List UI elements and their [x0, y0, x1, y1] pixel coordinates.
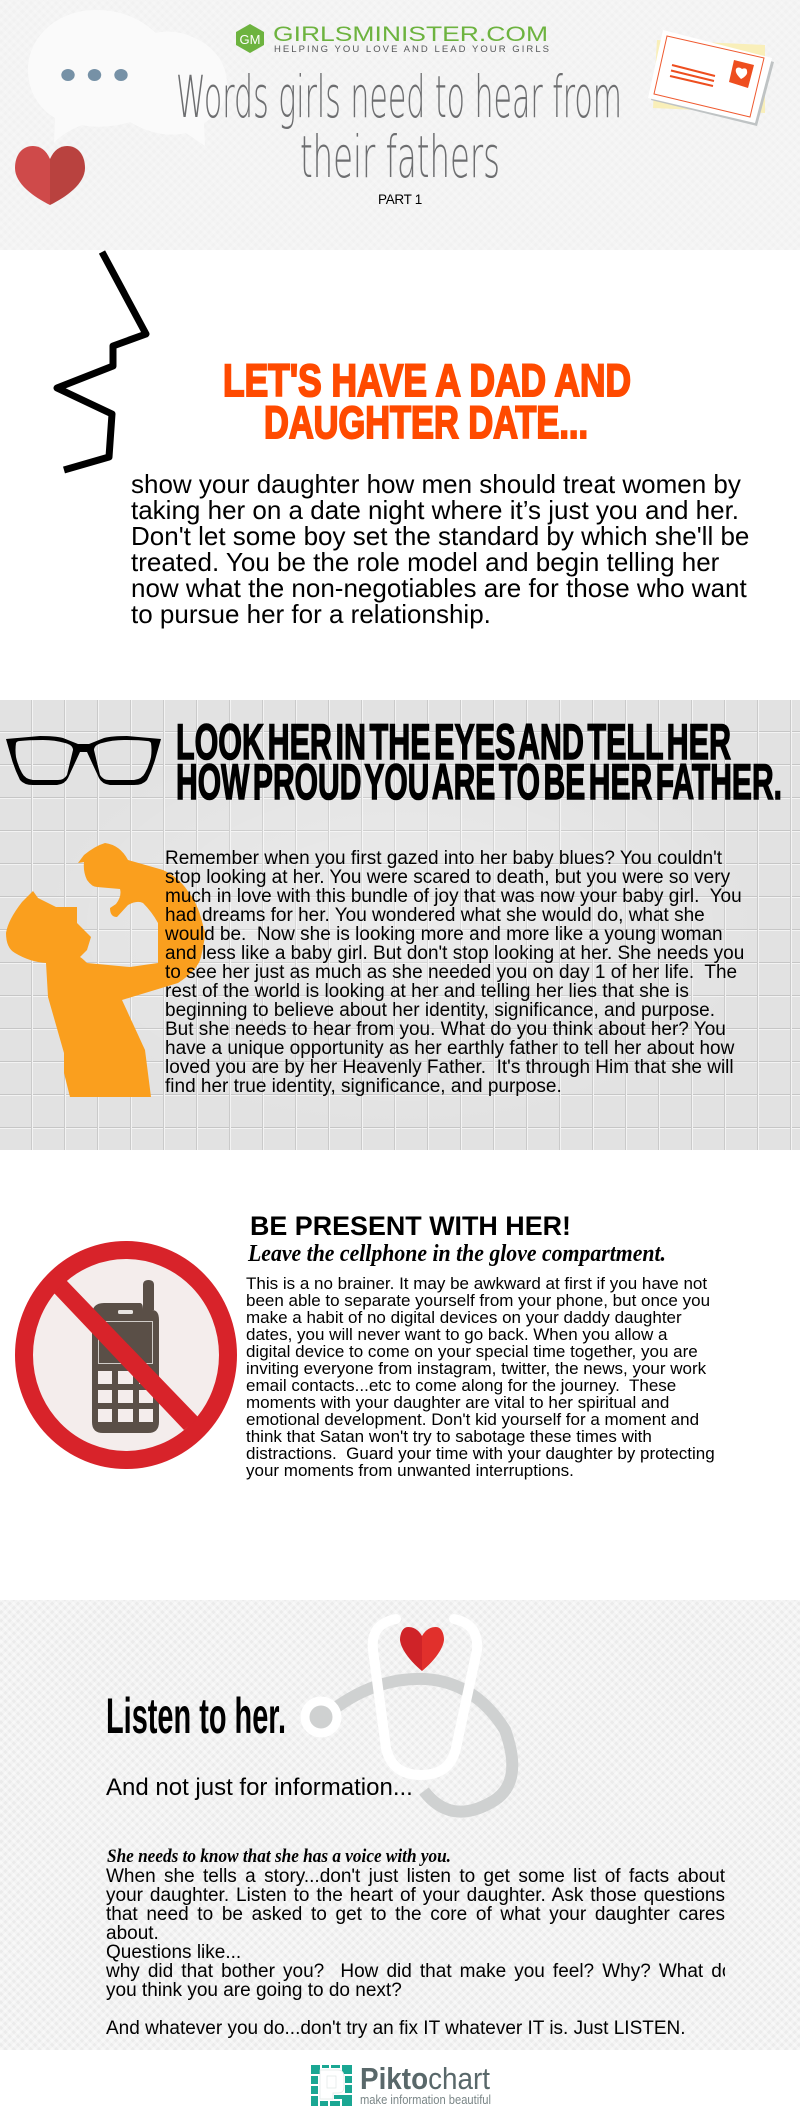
text: be present body: think that Satan won't try to sabotage these times with	[246, 1427, 652, 1446]
icon: red heart	[15, 146, 85, 205]
logo: girlsminister.com: GM	[240, 32, 260, 47]
text: date body: taking her on a date night where it’s just you and her.	[131, 495, 739, 525]
text: look her in the eyes body: Remember when you first gazed into her baby blues? You couldn't	[165, 848, 722, 869]
text: be present body: emotional development. Don't kid yourself for a moment and	[246, 1410, 699, 1429]
text: listen body	[106, 1867, 725, 2039]
heading: dad and daughter date: LET'S HAVE A DAD AND	[223, 355, 631, 406]
footer: piktochart logo	[0, 2050, 800, 2123]
text: be present body: distractions. Guard your time with your daughter by protecting	[246, 1444, 715, 1463]
title	[176, 63, 622, 191]
icon: stethoscope with heart	[300, 1614, 518, 1818]
text: date body: now what the non-negotiables are for those who want	[131, 573, 747, 603]
text: look her in the eyes body	[165, 848, 744, 1097]
panel: listen to her	[0, 1600, 800, 2050]
text: listen body: your daughter. Listen to the heart of your daughter. Ask those questions	[106, 1885, 725, 1906]
text: be present body: This is a no brainer. It may be awkward at first if you have not	[246, 1274, 707, 1293]
subheading: she has a voice: She needs to know that she has a voice with you.	[107, 1846, 451, 1867]
text: listen body: Questions like...	[106, 1942, 241, 1963]
subheading: and not just for information: And not just for information...	[106, 1774, 413, 1801]
heading: dad and daughter date	[223, 355, 631, 448]
text: look her in the eyes body: would be. Now she is looking more and more like a young woman	[165, 924, 723, 945]
text: look her in the eyes body: have a unique opportunity as her earthly father to tell her about how	[165, 1038, 734, 1059]
icon: three dots	[61, 69, 128, 81]
text: date body: to pursue her for a relationship.	[131, 599, 491, 629]
text: look her in the eyes body: beginning to believe about her identity, significance, and purpose.	[165, 1000, 715, 1021]
logo: girlsminister.com: HELPING YOU LOVE AND LEAD YOUR GIRLS	[274, 44, 549, 55]
text: listen body: And whatever you do...don't try an fix IT whatever IT is. Just LISTEN.	[106, 2018, 686, 2039]
wordmark: piktochart: Piktochart	[360, 2061, 490, 2096]
heading: listen to her: Listen to her.	[106, 1688, 286, 1744]
text: be present body: been able to separate yourself from your phone, but once you	[246, 1291, 710, 1310]
heading: be present with her: BE PRESENT WITH HER!	[250, 1211, 571, 1241]
text: look her in the eyes body: stop looking at her. You were scared to death, but you were so very	[165, 867, 730, 888]
text: be present body	[246, 1274, 715, 1480]
heading: dad and daughter date: DAUGHTER DATE...	[264, 397, 588, 448]
text: be present body: make a habit of no digital devices on your daddy daughter	[246, 1308, 682, 1327]
text: date body	[131, 469, 749, 629]
panel: header	[0, 0, 800, 250]
text: date body: treated. You be the role model and begin telling her	[131, 547, 719, 577]
panel: look her in the eyes	[0, 700, 800, 1150]
text: be present body: email contacts...etc to come along for the journey. These	[246, 1376, 676, 1395]
panel: be present	[0, 1150, 800, 1600]
text: look her in the eyes body: and less like a baby girl. But don't stop looking at her. She needs you	[165, 943, 744, 964]
wordmark: piktochart: make information beautiful	[360, 2093, 491, 2107]
icon: piktochart mark	[311, 2065, 352, 2106]
text: look her in the eyes body: loved you are by her Heavenly Father. It's through Him that she will	[165, 1057, 734, 1078]
text: look her in the eyes body: find her true identity, significance, and purpose.	[165, 1076, 562, 1097]
subheading: leave the cellphone: Leave the cellphone in the glove compartment.	[247, 1241, 666, 1267]
text: listen body: that need to be asked to get to the core of what your daughter cares	[106, 1904, 725, 1925]
heading: look her in the eyes	[176, 714, 782, 810]
icon: glasses	[6, 736, 161, 785]
text: be present body: moments with your daughter are vital to her spiritual and	[246, 1393, 669, 1412]
text: be present body: inviting everyone from instagram, twitter, the news, your work	[246, 1359, 706, 1378]
icon: face profile zigzag	[54, 250, 150, 474]
subtitle: part 1: PART 1	[378, 192, 422, 207]
text: look her in the eyes body: had dreams for her. You wondered what she would do, what she	[165, 905, 705, 926]
icon: no cellphone sign	[15, 1241, 237, 1469]
text: look her in the eyes body: to see her just as much as she needed you on day 1 of her life. The	[165, 962, 737, 983]
text: listen body: about.	[106, 1923, 159, 1944]
text: look her in the eyes body: But she needs to hear from you. What do you think about her? You	[165, 1019, 726, 1040]
text: date body: show your daughter how men should treat women by	[131, 469, 741, 499]
text: listen body: why did that bother you? How did that make you feel? Why? What do	[106, 1961, 725, 1982]
text: listen body: you think you are going to do next?	[106, 1980, 402, 2001]
illustration: father lifting baby	[6, 843, 205, 1097]
text: date body: Don't let some boy set the standard by which she'll be	[131, 521, 749, 551]
text: look her in the eyes body: rest of the world is looking at her and telling her lies that she is	[165, 981, 689, 1002]
title: their fathers	[300, 123, 500, 191]
text: look her in the eyes body: much in love with this bundle of joy that was now your baby girl. You	[165, 886, 742, 907]
text: be present body: dates, you will never want to go back. When you allow a	[246, 1325, 667, 1344]
icon: speech bubbles	[28, 10, 226, 144]
text: be present body: digital device to come on your special time together, you are	[246, 1342, 698, 1361]
logo: girlsminister.com: GIRLSMINISTER.COM	[273, 23, 548, 46]
logo: girlsminister.com	[236, 23, 549, 55]
icon: postcard	[648, 30, 774, 126]
text: be present body: your moments from unwanted interruptions.	[246, 1461, 574, 1480]
panel: date night	[0, 250, 800, 700]
